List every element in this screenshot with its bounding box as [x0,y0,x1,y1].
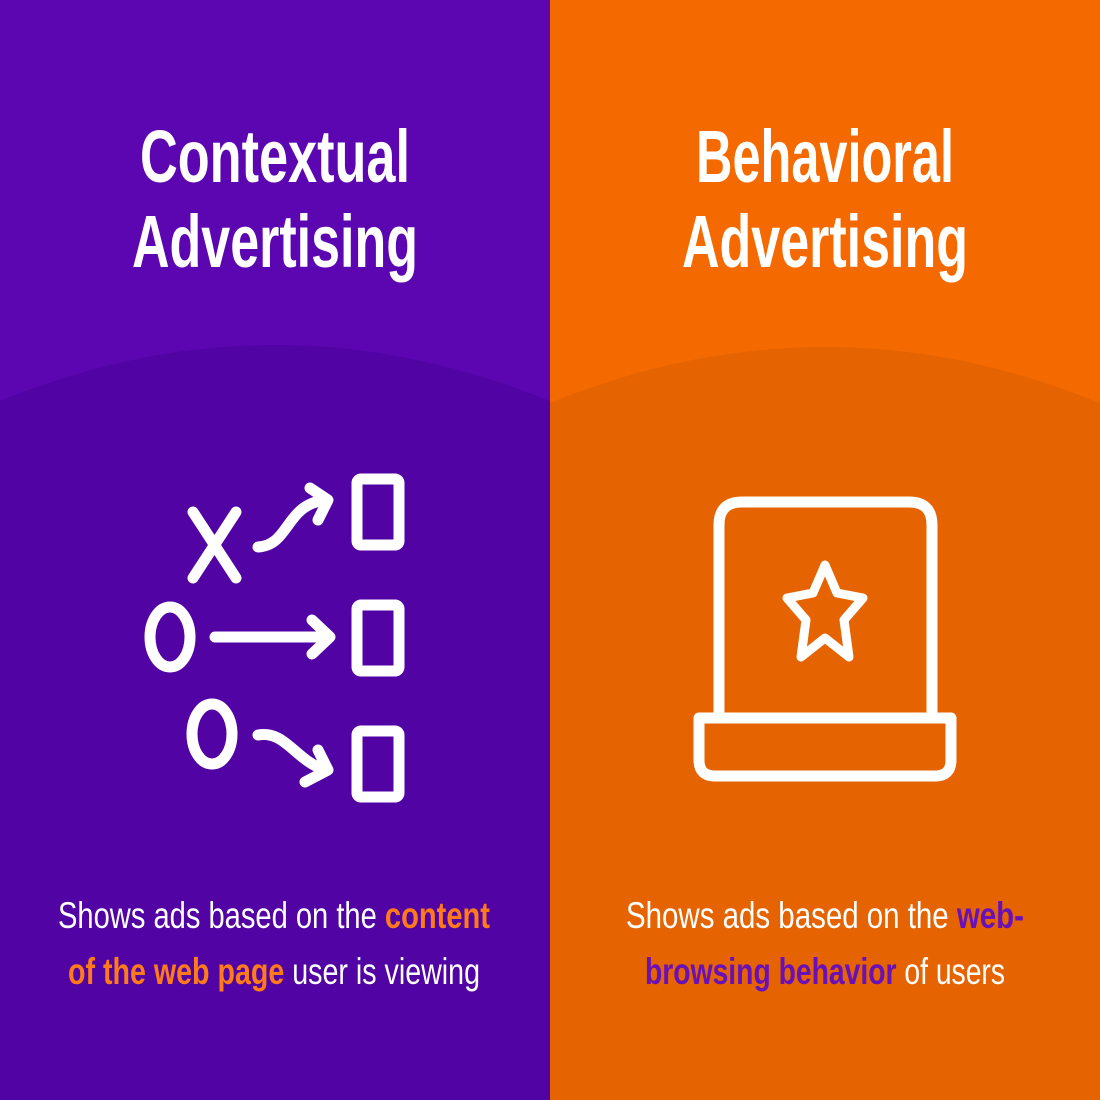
title: contextual advertising: Advertising [132,200,418,283]
text: contextual description [58,895,490,992]
text: behavioral description [626,895,1024,992]
title: behavioral advertising [682,115,968,283]
text: contextual description: of the web page user is viewing [68,951,480,992]
text: behavioral description: Shows ads based on the web- [626,895,1024,936]
title: contextual advertising: Contextual [140,115,410,198]
icon: strategy play diagram [150,479,399,797]
icon: laptop with star [699,502,951,776]
title: behavioral advertising: Advertising [682,200,968,283]
text: contextual description: Shows ads based on the content [58,895,490,936]
title: contextual advertising [132,115,418,283]
text: behavioral description: browsing behavior of users [645,951,1005,992]
panel: behavioral background [550,0,1100,1100]
title: behavioral advertising: Behavioral [696,115,954,198]
panel: contextual background [0,0,550,1100]
